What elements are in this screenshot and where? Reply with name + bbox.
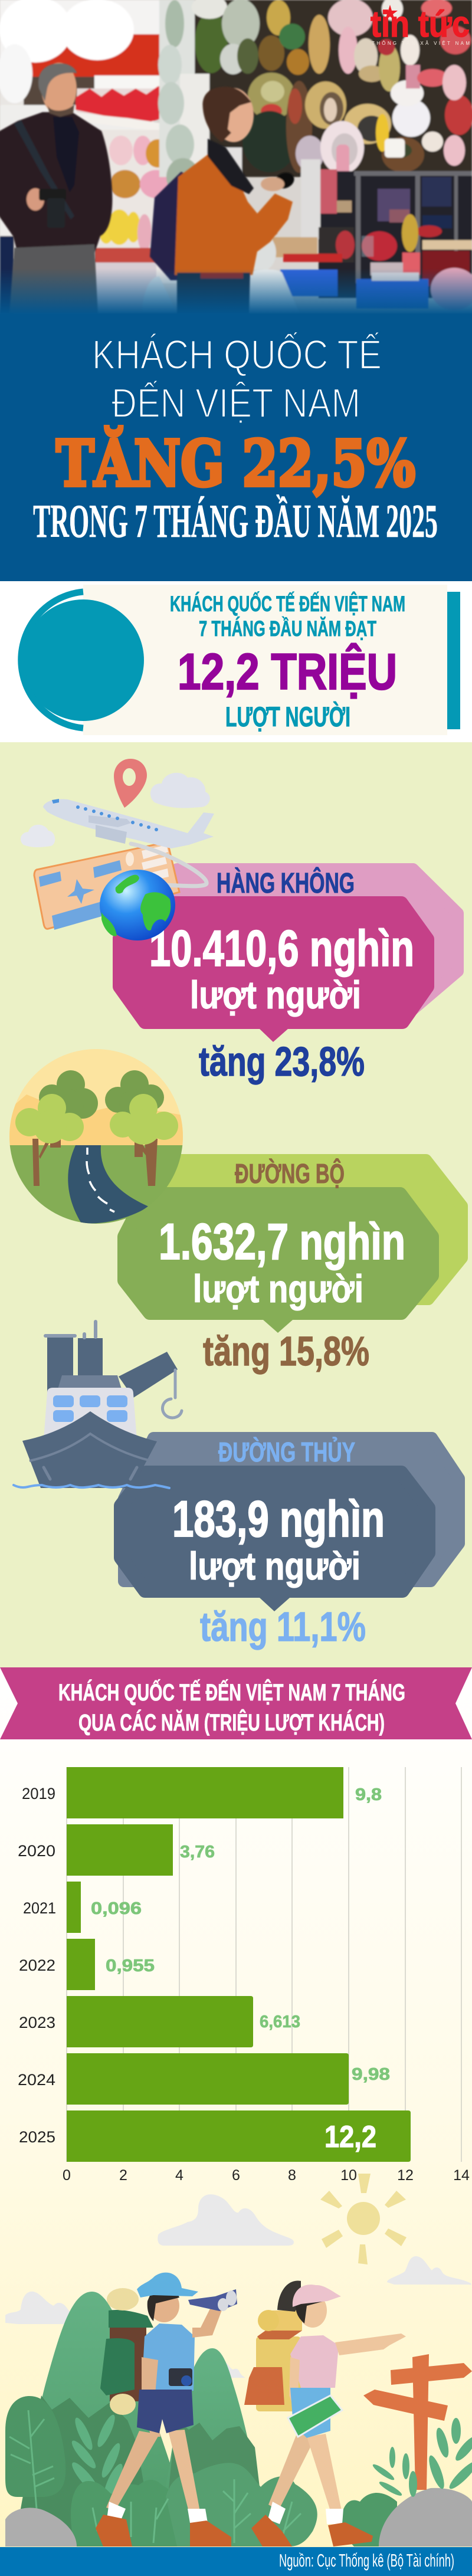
year labels: 2020: [18, 1842, 55, 1860]
shorts: [137, 2390, 194, 2433]
bottom fade into the blue panel: [0, 268, 472, 314]
bedroll: [268, 2310, 302, 2331]
panel: chart area background: [0, 1667, 472, 2547]
icon: sun: [320, 2174, 407, 2264]
callout: air: HÀNG KHÔNG: [217, 867, 355, 899]
value labels: 0,955: [106, 1956, 155, 1975]
callout: road: [124, 1158, 462, 1374]
logo: Tin Tức: THÔNG TẤN XÃ VIỆT NAM: [372, 40, 470, 46]
shelves: [319, 171, 472, 298]
icon: road and trees: [6, 1047, 189, 1228]
illustration: signpost: [363, 2354, 472, 2490]
head: [149, 2289, 179, 2322]
heading ribbon: [0, 1667, 472, 1739]
callout: water: ĐƯỜNG THỦY: [218, 1437, 355, 1467]
icon: map pin: [114, 759, 147, 808]
text: total headline: [170, 591, 405, 732]
callout: road: lượt người: [193, 1267, 363, 1310]
tree trunks: [32, 1136, 158, 1186]
hero photo: tourists at a decoration stall: [0, 0, 472, 315]
icon: swoosh: [131, 844, 206, 886]
callout: air: tăng 23,8%: [199, 1038, 365, 1084]
value labels: 12,2: [324, 2120, 376, 2154]
head: [299, 2293, 327, 2328]
value labels: [91, 1785, 390, 2154]
man: [0, 63, 112, 314]
teal side bar: [447, 592, 460, 729]
icon: teal circle: [21, 592, 144, 728]
text: total headline: 12,2 TRIỆU: [178, 644, 397, 700]
callout: road: ĐƯỜNG BỘ: [235, 1158, 345, 1189]
axis labels: 0: [63, 2167, 71, 2184]
shirt: [142, 2323, 195, 2391]
backpack: [110, 2322, 146, 2401]
stall dark base: [195, 0, 472, 177]
year labels: [18, 1785, 56, 2146]
map: [288, 2395, 342, 2437]
axis labels: 4: [175, 2167, 183, 2184]
binoculars: [188, 2289, 237, 2311]
value labels: 3,76: [180, 1843, 215, 1861]
footer source: [0, 2547, 472, 2576]
text: total headline: LƯỢT NGƯỜI: [225, 701, 350, 732]
shirt: [290, 2335, 339, 2388]
callout: water: 183,9 nghìn: [172, 1491, 385, 1548]
value labels: 6,613: [260, 2013, 300, 2031]
illustration: plants right: [371, 2418, 472, 2498]
year labels: 2019: [22, 1785, 55, 1802]
backpack: [256, 2336, 301, 2411]
plant leaves left: [68, 2413, 126, 2500]
icon: globe: [100, 870, 175, 940]
value labels: 9,98: [352, 2065, 390, 2084]
callout: road: 1.632,7 nghìn: [159, 1214, 405, 1270]
camera: [169, 2368, 192, 2386]
callout: road: tăng 15,8%: [203, 1328, 369, 1374]
year labels: 2023: [19, 2014, 55, 2031]
axis labels: 6: [232, 2167, 240, 2184]
dark trees: [39, 1070, 164, 1124]
icon: clouds: [5, 2194, 471, 2378]
callout: air: [120, 867, 458, 1084]
bush tall: [5, 2396, 65, 2509]
wreaths: [248, 73, 295, 120]
illustration: female hiker: [244, 2280, 406, 2546]
callout: water: [121, 1437, 459, 1650]
callout: water: lượt người: [189, 1544, 360, 1588]
axis labels: 14: [453, 2167, 470, 2184]
text: total headline: 7 THÁNG ĐẦU NĂM ĐẠT: [199, 617, 376, 641]
ponytail: [277, 2280, 301, 2312]
cap: [293, 2285, 341, 2307]
icon: plane: [43, 799, 214, 848]
panel: transport modes background: [0, 742, 472, 1667]
shorts: [290, 2388, 330, 2438]
panel: title: [0, 314, 472, 581]
icon: ship: [14, 1320, 182, 1488]
scooter: [245, 234, 276, 271]
icon: plane, ticket, pin and globe: [21, 759, 214, 940]
rocks: [5, 2508, 77, 2546]
heading line 1: KHÁCH QUỐC TẾ: [92, 331, 382, 378]
illustration: mountains and plants: [5, 2292, 472, 2546]
icon: small cloud: [21, 825, 55, 847]
value labels: 9,8: [355, 1785, 382, 1804]
axis labels: 12: [397, 2167, 414, 2184]
bars: [67, 1767, 411, 2162]
callout: water: tăng 11,1%: [200, 1604, 366, 1650]
bushes: [71, 2480, 192, 2546]
illustration: male hiker: [96, 2273, 237, 2546]
heading line 2: ĐẾN VIỆT NAM: [112, 380, 360, 426]
bar chart: [18, 1767, 470, 2184]
hat: [137, 2273, 198, 2298]
axis labels: 2: [119, 2167, 127, 2184]
axis labels: 10: [340, 2167, 357, 2184]
light trees: [15, 1094, 178, 1145]
panel: total visitors: [0, 581, 472, 742]
garland: [165, 0, 184, 47]
icon: ticket: [34, 842, 179, 930]
axis labels: 8: [288, 2167, 296, 2184]
year labels: 2025: [19, 2128, 55, 2146]
year labels: 2024: [18, 2071, 55, 2089]
woman: [150, 87, 296, 315]
year labels: 2022: [19, 1956, 55, 1974]
year labels: 2021: [23, 1899, 56, 1917]
value labels: 0,096: [91, 1899, 142, 1918]
callout: air: lượt người: [190, 973, 361, 1017]
axis labels: [63, 2167, 470, 2184]
icon: cloud: [150, 773, 210, 808]
